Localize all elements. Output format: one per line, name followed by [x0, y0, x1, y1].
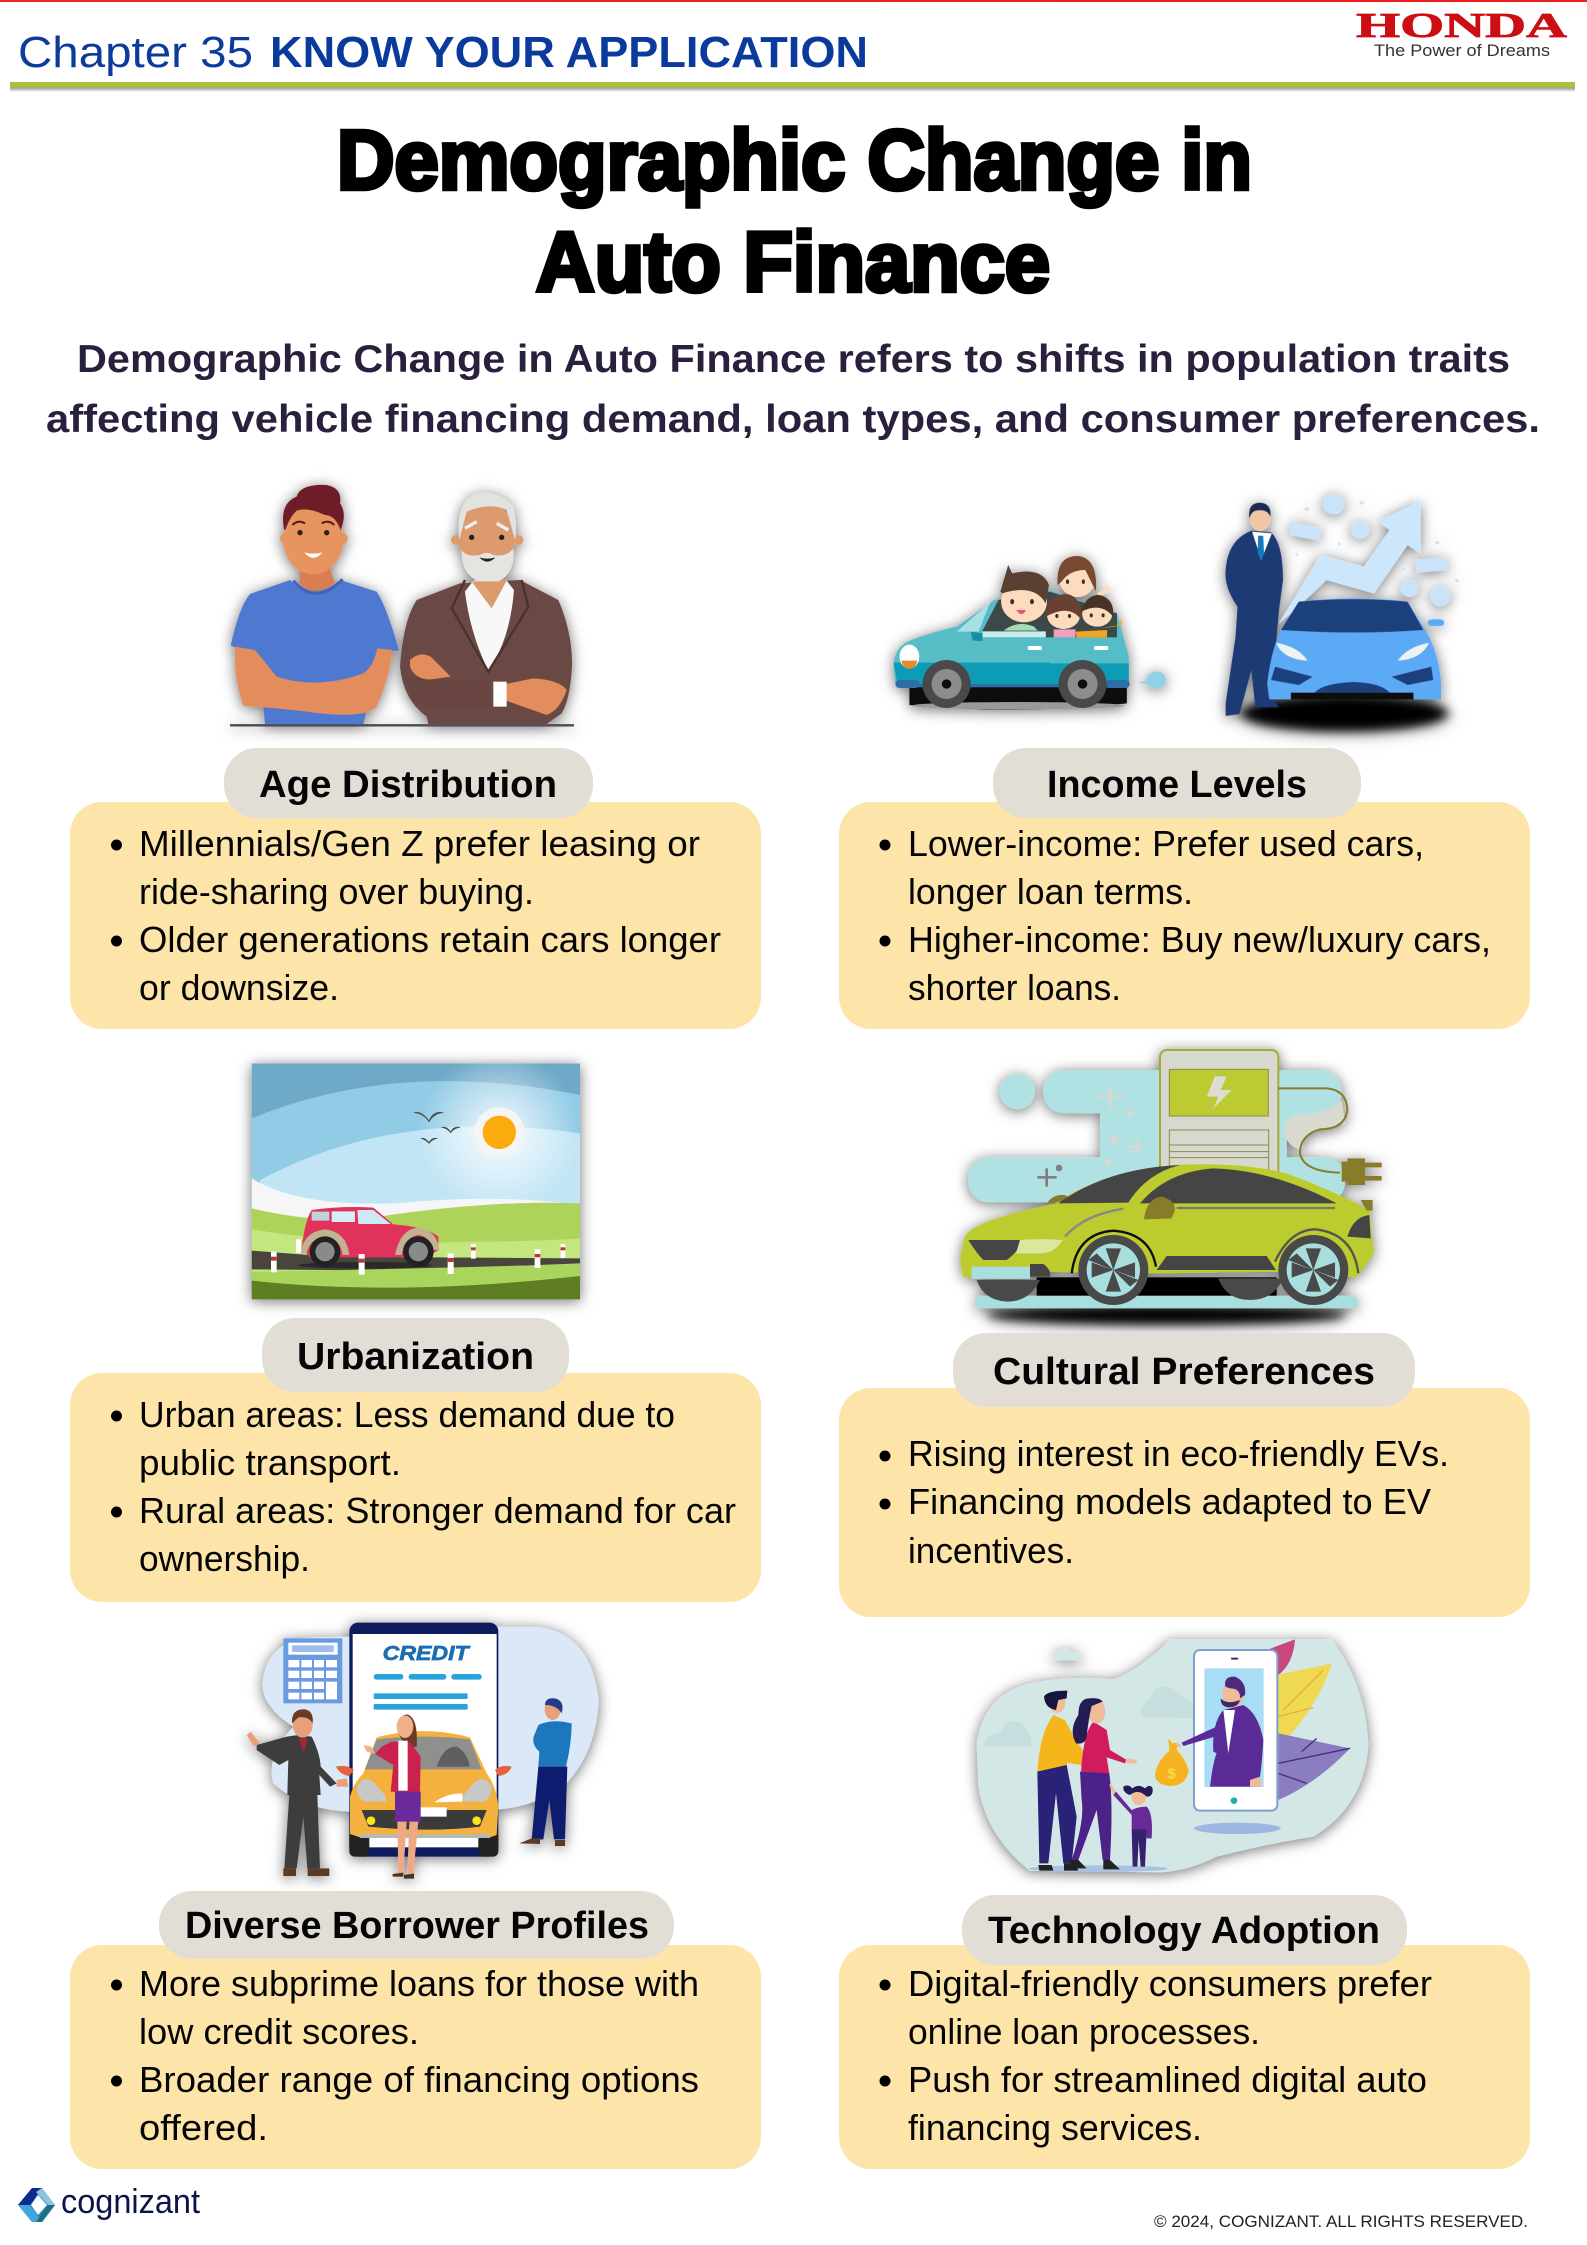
- chapter header: KNOW YOUR APPLICATION: [270, 28, 868, 77]
- bullet list: Lower-income: Prefer used cars,: [908, 823, 1424, 864]
- bullet list: [880, 1433, 1449, 1571]
- exhaust puff: [1138, 671, 1166, 689]
- phone shadow: [1194, 1823, 1281, 1834]
- logo: Honda: The Power of Dreams: [1374, 42, 1550, 60]
- header rule: [10, 82, 1575, 92]
- illustration: young and older man: [230, 485, 574, 725]
- cable and plug: [1278, 1088, 1382, 1185]
- heading pill: [224, 748, 593, 818]
- bullet list: offered.: [139, 2107, 268, 2148]
- bullet list: Broader range of financing options: [139, 2059, 699, 2100]
- panel: cultural preferences: [839, 1333, 1530, 1617]
- chapter header: [18, 28, 868, 77]
- man in suit: [1225, 503, 1283, 716]
- bullet list: Push for streamlined digital auto: [908, 2059, 1427, 2100]
- box: [70, 1945, 761, 2169]
- calculator: [283, 1638, 342, 1703]
- illustration: electric car and charging station: [960, 1050, 1382, 1324]
- credit phone: [349, 1623, 498, 1857]
- illustration: family car and luxury car: [894, 494, 1459, 731]
- copyright: © 2024, COGNIZANT. ALL RIGHTS RESERVED.: [1154, 2212, 1528, 2231]
- logo: Honda: [1356, 6, 1568, 60]
- customer: [519, 1698, 572, 1846]
- heading pill: [993, 748, 1361, 818]
- family in the car: [1000, 556, 1123, 638]
- panel: income levels: [839, 748, 1530, 1029]
- saleswoman: [363, 1714, 421, 1879]
- bullet list: Higher-income: Buy new/luxury cars,: [908, 919, 1491, 960]
- bullet list: [880, 1963, 1432, 2148]
- bullet list: Millennials/Gen Z prefer leasing or: [139, 823, 700, 864]
- money bag: [1155, 1738, 1189, 1786]
- bullet list: low credit scores.: [139, 2011, 419, 2052]
- growth arrow: [1279, 501, 1421, 623]
- sparkles: [1037, 1085, 1146, 1187]
- panel: technology adoption: [839, 1895, 1530, 2169]
- bullet list: Digital-friendly consumers prefer: [908, 1963, 1432, 2004]
- box: [70, 1373, 761, 1602]
- bullet list: Older generations retain cars longer: [139, 919, 721, 960]
- money bag: $: [1168, 1766, 1176, 1782]
- coins and notes: [1290, 494, 1459, 606]
- logo: Honda: HONDA: [1356, 6, 1568, 45]
- bullet list: Financing models adapted to EV: [908, 1481, 1432, 1522]
- bullet list: Urban areas: Less demand due to: [139, 1394, 675, 1435]
- family ground shadow: [1029, 1865, 1168, 1872]
- car body: [960, 1164, 1374, 1302]
- bullet list: online loan processes.: [908, 2011, 1260, 2052]
- title: Demographic Change in: [337, 113, 1252, 207]
- road: [252, 1251, 580, 1271]
- birds: [414, 1112, 460, 1143]
- heading pill: Technology Adoption: [988, 1910, 1380, 1952]
- heading pill: Diverse Borrower Profiles: [185, 1905, 649, 1947]
- bullet list: ride-sharing over buying.: [139, 871, 534, 912]
- mother: [1070, 1698, 1137, 1869]
- father: [1037, 1690, 1097, 1871]
- sun: [474, 1107, 524, 1157]
- young man: [231, 485, 399, 724]
- shadow under luxury car: [1241, 696, 1448, 731]
- box: [839, 1388, 1530, 1617]
- heading pill: Age Distribution: [259, 764, 557, 806]
- ground shadow and strip: [975, 1277, 1358, 1324]
- heading pill: [262, 1318, 569, 1392]
- bullet list: Rising interest in eco-friendly EVs.: [908, 1433, 1449, 1474]
- bullet list: longer loan terms.: [908, 871, 1193, 912]
- red car: [298, 1207, 439, 1269]
- leaves: [1267, 1639, 1350, 1800]
- bullet list: financing services.: [908, 2107, 1202, 2148]
- intro text: [46, 338, 1540, 441]
- yellow car: [336, 1731, 512, 1857]
- child: [1109, 1783, 1153, 1867]
- box: [839, 802, 1530, 1029]
- salesman: [247, 1709, 348, 1876]
- logo: Cognizant: cognizant: [61, 2183, 201, 2221]
- bullet list: ownership.: [139, 1538, 310, 1579]
- chapter header: Chapter 35: [18, 28, 253, 77]
- credit phone: CREDIT: [383, 1643, 471, 1665]
- phone with banker: [1182, 1650, 1277, 1811]
- illustration: rural road scene: [252, 1052, 580, 1299]
- luxury car: [1267, 598, 1444, 699]
- heading pill: Cultural Preferences: [993, 1351, 1375, 1393]
- intro text: Demographic Change in Auto Finance refers to shifts in population traits: [77, 338, 1510, 381]
- heading pill: Urbanization: [297, 1336, 534, 1378]
- bullet list: public transport.: [139, 1442, 401, 1483]
- road posts: [271, 1239, 565, 1275]
- bullet list: [880, 823, 1491, 1008]
- panel: urbanization: [70, 1318, 761, 1602]
- wheels: [1078, 1235, 1348, 1305]
- bullet list: shorter loans.: [908, 967, 1121, 1008]
- bullet list: [111, 1394, 736, 1579]
- charging station: [1160, 1050, 1278, 1190]
- panel: diverse borrower profiles: [70, 1891, 761, 2169]
- bullet list: More subprime loans for those with: [139, 1963, 699, 2004]
- heading pill: Income Levels: [1047, 764, 1307, 806]
- title: Auto Finance: [536, 215, 1050, 309]
- box: [70, 802, 761, 1029]
- panel: age distribution: [70, 748, 761, 1029]
- sky: [252, 1063, 580, 1299]
- bullet list: Rural areas: Stronger demand for car: [139, 1490, 736, 1531]
- illustration: digital lending: [977, 1639, 1368, 1872]
- box: [839, 1945, 1530, 2169]
- heading pill: [962, 1895, 1407, 1965]
- heading pill: [953, 1333, 1415, 1407]
- white cloud band: [252, 1178, 580, 1227]
- clouds: [983, 1648, 1193, 1747]
- heading pill: [159, 1891, 674, 1959]
- title: [337, 113, 1252, 309]
- bullet list: or downsize.: [139, 967, 339, 1008]
- family car: [894, 590, 1130, 710]
- foreground grass: [252, 1264, 580, 1299]
- bullet list: [111, 1963, 699, 2148]
- illustration: credit application: [247, 1623, 599, 1879]
- background clouds: [968, 1070, 1345, 1202]
- background blob: [262, 1627, 599, 1812]
- green hills: [252, 1203, 580, 1273]
- older man: [400, 493, 572, 724]
- bullet list: incentives.: [908, 1530, 1074, 1571]
- background blob: [977, 1639, 1368, 1872]
- top red rule: [0, 0, 1587, 2]
- bullet list: [111, 823, 721, 1008]
- intro text: affecting vehicle financing demand, loan types, and consumer preferences.: [46, 398, 1540, 441]
